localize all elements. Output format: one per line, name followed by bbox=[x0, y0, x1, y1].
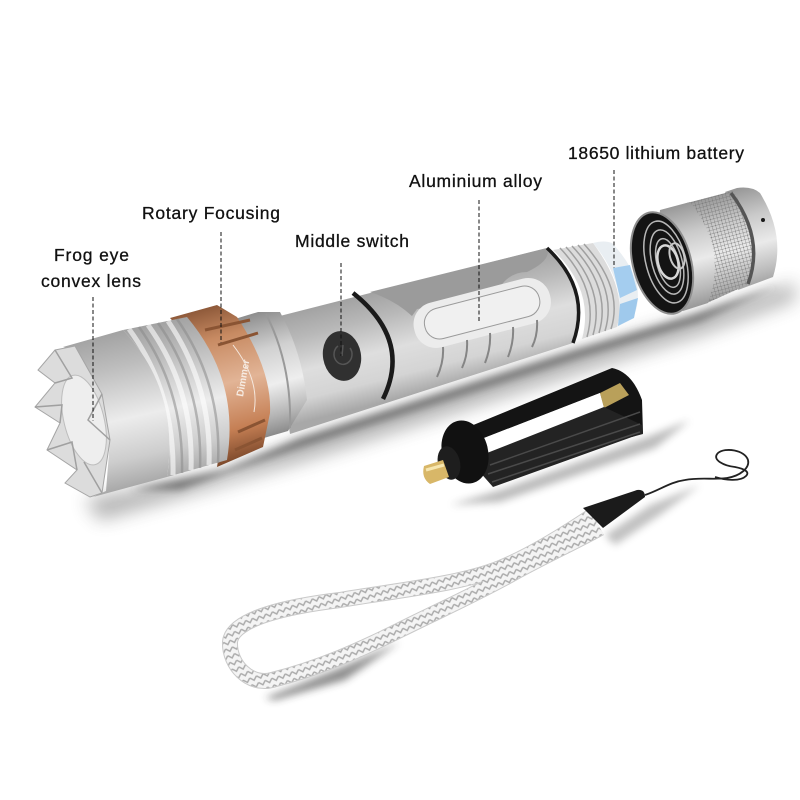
holder opening bbox=[484, 393, 604, 453]
label: Rotary Focusing: Rotary Focusing bbox=[142, 203, 280, 223]
cap screw hole bbox=[761, 218, 765, 222]
braided rope loop bbox=[230, 516, 600, 681]
holder lower body bbox=[478, 407, 643, 487]
label: 18650 lithium battery: 18650 lithium battery bbox=[568, 143, 744, 163]
flashlight bbox=[35, 242, 638, 497]
label: Middle switch bbox=[295, 231, 409, 356]
grip dark band bbox=[370, 248, 548, 316]
wrist strap bbox=[230, 450, 748, 681]
strap ferrule bbox=[583, 490, 645, 528]
strike bezel and lens bbox=[35, 346, 115, 497]
label: Aluminium alloy: Aluminium alloy bbox=[409, 171, 542, 191]
tail cap bbox=[621, 188, 777, 321]
cast shadows bbox=[85, 283, 795, 700]
tube body bbox=[272, 248, 579, 434]
copper focusing ring bbox=[170, 305, 270, 467]
cap end section bbox=[725, 188, 777, 290]
cord loop bbox=[645, 450, 748, 495]
label: Middle switch: Middle switch bbox=[295, 231, 409, 251]
label: Frog eye convex lens: Frog eye bbox=[54, 245, 129, 265]
holder end disc bbox=[435, 415, 495, 489]
label: Frog eye convex lens bbox=[41, 245, 141, 421]
rubber o-ring rear bbox=[547, 248, 579, 343]
grip pill panel bbox=[409, 273, 556, 353]
holder back wall bbox=[466, 368, 643, 458]
label: Frog eye convex lens: convex lens bbox=[41, 271, 141, 291]
power switch bbox=[319, 328, 365, 384]
cap spring bbox=[636, 216, 696, 308]
battery holder bbox=[423, 368, 643, 489]
cap opening bbox=[621, 205, 703, 321]
cap dark band bbox=[731, 193, 754, 284]
neck collar bbox=[225, 312, 307, 445]
label: Rotary Focusing bbox=[142, 203, 280, 343]
grooved head section bbox=[123, 317, 230, 477]
battery cell bbox=[593, 242, 638, 327]
copper focusing ring: Dimmer bbox=[235, 359, 252, 398]
brass contact pin bbox=[423, 460, 449, 484]
rubber o-ring front bbox=[353, 293, 393, 399]
grip grooves bbox=[437, 320, 537, 377]
head barrel bbox=[63, 330, 169, 497]
battery spring contact bbox=[600, 383, 629, 408]
cap front collar bbox=[658, 202, 715, 311]
threaded section bbox=[553, 243, 620, 339]
cap knurled body bbox=[687, 191, 753, 303]
